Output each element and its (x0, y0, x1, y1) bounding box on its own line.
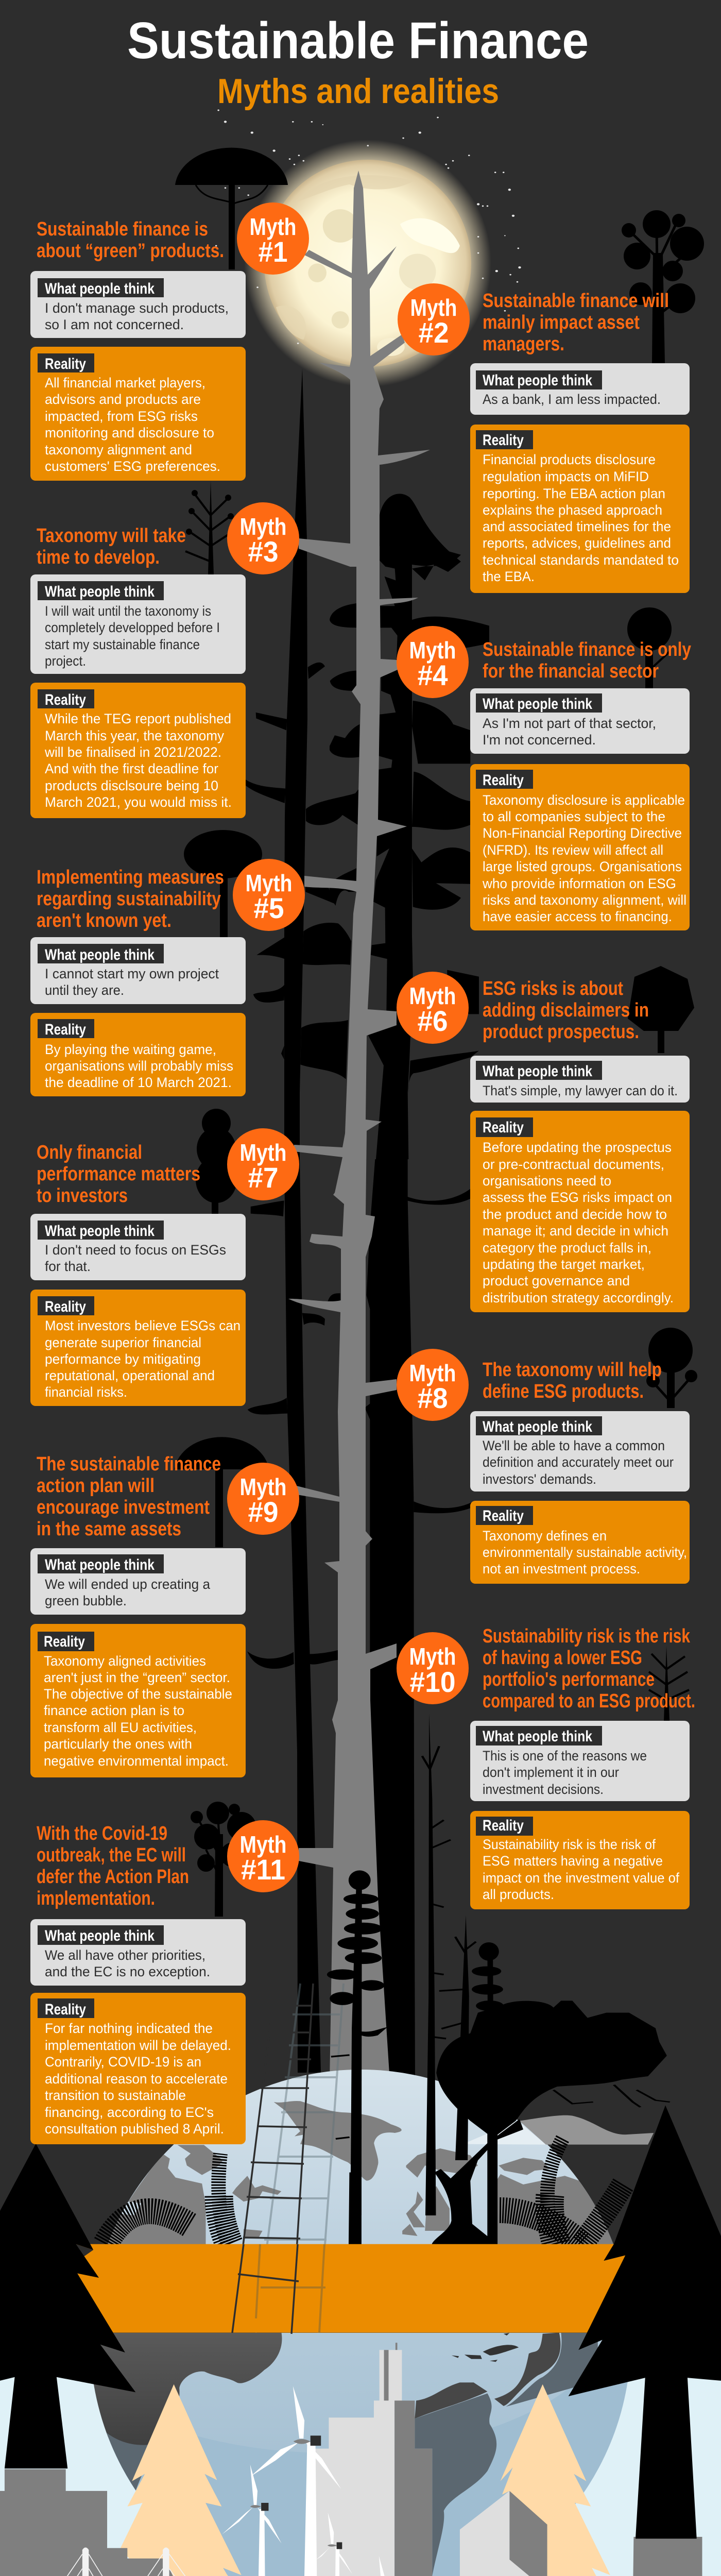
myth 4 reality: large listed groups. Organisations (483, 859, 682, 874)
myth 2 badge: Myth (410, 294, 457, 321)
ladder: dark (232, 1984, 313, 2334)
myth 11 badge (227, 1820, 299, 1892)
myth 11 heading: With the Covid-19 (37, 1823, 167, 1844)
black trees behind the text (175, 148, 704, 1917)
myth 10 badge: #10 (410, 1666, 455, 1698)
myth 9 badge: #9 (248, 1496, 278, 1528)
myth 9 reality: transform all EU activities, (44, 1720, 197, 1735)
myth 6 badge: Myth (409, 982, 456, 1009)
myth 6 reality: Reality (483, 1119, 524, 1136)
ghost ladder (256, 1984, 344, 2339)
tree: fir near myth 10 (649, 1646, 689, 1721)
myth 5 badge: #5 (253, 892, 284, 924)
myth 8 reality: environmentally sustainable activity, (483, 1545, 687, 1560)
myth 3 what people think: completely developped before I (45, 620, 220, 635)
myth 1 heading (37, 218, 224, 262)
myth 6 heading (483, 978, 649, 1043)
myth 11 what people think: What people think (45, 1927, 154, 1944)
myth 7 reality: generate superior financial (45, 1335, 201, 1350)
myth 10 reality: impact on the investment value of (483, 1870, 679, 1886)
myth 7 badge (227, 1128, 299, 1200)
myth 11 badge: #11 (241, 1853, 285, 1886)
orange band with ladders (76, 2244, 625, 2334)
right trunk and leaves (upper) (246, 541, 489, 1159)
myth 2 reality: explains the phased approach (483, 502, 662, 518)
myth 10 badge (397, 1632, 469, 1704)
myth 4 reality: Non-Financial Reporting Directive (483, 825, 682, 841)
myth 6 what people think: That's simple, my lawyer can do it. (483, 1083, 678, 1098)
myth 11 badge: Myth (240, 1831, 286, 1858)
myth 2 what people think (470, 363, 690, 415)
myth 11 heading: outbreak, the EC will (37, 1844, 186, 1866)
myth 4 reality (470, 764, 690, 930)
myth 11 reality (30, 1993, 246, 2144)
myth 5 reality: organisations will probably miss (45, 1058, 233, 1074)
myth 2 heading: managers. (483, 333, 564, 355)
myth 10 what people think (470, 1721, 690, 1801)
right trunk (bottom) (372, 1772, 415, 2081)
myth 2 what people think: As a bank, I am less impacted. (483, 392, 661, 407)
myth 9 heading: encourage investment (37, 1497, 210, 1518)
myth 7 what people think: for that. (45, 1259, 91, 1274)
myth 8 heading: The taxonomy will help (483, 1359, 662, 1381)
myth 11 reality: For far nothing indicated the (45, 2021, 213, 2036)
skyline (0, 2343, 721, 2576)
myth 3 reality: March 2021, you would miss it. (45, 794, 232, 810)
myth 4 what people think: I'm not concerned. (483, 732, 596, 748)
myth 10 heading (483, 1625, 695, 1712)
title: Sustainable Finance (127, 12, 589, 70)
myth 6 reality: updating the target market, (483, 1257, 645, 1272)
myth 10 what people think: don't implement it in our (483, 1765, 619, 1780)
myth 2 reality: and associated timelines for the (483, 519, 671, 534)
tree: umbrella near myth 9 (175, 1437, 269, 1547)
myth 6 reality: Before updating the prospectus (483, 1140, 672, 1155)
myth 11 heading: implementation. (37, 1888, 155, 1909)
myth 4 what people think: As I'm not part of that sector, (483, 716, 656, 731)
myth 9 badge: Myth (240, 1473, 286, 1500)
trunk: left black (284, 368, 321, 2073)
myth 7 what people think: What people think (45, 1223, 154, 1240)
myth 7 heading: to investors (37, 1185, 128, 1207)
cream pine left (121, 2384, 249, 2576)
panel: myth 5 (30, 859, 305, 1096)
myth 7 badge: Myth (240, 1139, 286, 1166)
myth 7 badge: #7 (248, 1161, 278, 1194)
myth 6 reality: or pre-contractual documents, (483, 1157, 664, 1172)
myth 3 what people think: I will wait until the taxonomy is (45, 603, 211, 619)
myth 3 badge: #3 (248, 535, 278, 568)
myth 3 what people think: start my sustainable finance (45, 637, 200, 652)
myth 5 badge (233, 859, 305, 931)
myth 8 reality: not an investment process. (483, 1561, 640, 1577)
myth 3 what people think: What people think (45, 583, 154, 600)
myth 6 reality: manage it; and decide in which (483, 1223, 668, 1239)
panel: myth 9 (30, 1453, 299, 1777)
myth 6 reality: organisations need to (483, 1173, 611, 1189)
myth 4 badge: Myth (409, 637, 456, 664)
tree: round near myth 8 (646, 1328, 697, 1408)
myth 1 what people think: What people think (45, 280, 154, 297)
myth 9 heading (37, 1453, 221, 1540)
myth 5 reality: By playing the waiting game, (45, 1042, 216, 1057)
myth 10 reality (470, 1811, 690, 1909)
myth 10 what people think: investment decisions. (483, 1782, 604, 1797)
myth 1 reality: Reality (45, 355, 86, 372)
myth 4 reality: (NFRD). Its review will affect all (483, 842, 663, 858)
myth 4 heading (483, 639, 691, 682)
myth 6 badge: #6 (417, 1005, 448, 1037)
myth 1 reality (30, 347, 246, 481)
myth 6 what people think (470, 1056, 690, 1103)
panel: myth 10 (397, 1625, 695, 1909)
myth 3 reality: March this year, the taxonomy (45, 728, 224, 743)
myth 3 reality: products disclsoure being 10 (45, 778, 218, 793)
panel: myth 2 (398, 283, 690, 593)
myth 2 badge: #2 (418, 316, 449, 349)
globe lower half (94, 2333, 627, 2576)
myth 8 reality: Reality (483, 1507, 524, 1524)
myth 11 reality: transition to sustainable (45, 2088, 186, 2103)
myth 6 heading: product prospectus. (483, 1021, 639, 1043)
myth 9 what people think: green bubble. (45, 1593, 127, 1608)
tree: round leaves near myth 2 (622, 210, 704, 363)
myth 6 reality: assess the ESG risks impact on (483, 1190, 672, 1205)
myth 8 what people think: We'll be able to have a common (483, 1438, 665, 1453)
myth 3 reality: Reality (45, 691, 86, 708)
myth 9 what people think (30, 1548, 246, 1615)
myth 4 what people think: What people think (483, 696, 592, 713)
myth 2 reality: technical standards mandated to (483, 552, 679, 568)
panel: myth 1 (30, 202, 309, 481)
myth 10 reality: ESG matters having a negative (483, 1853, 663, 1869)
myth 10 what people think: What people think (483, 1728, 592, 1745)
left black pine (0, 2144, 135, 2468)
myth 1 reality: advisors and products are (45, 392, 201, 407)
tree: blobs near myth 7 (196, 1109, 237, 1214)
myth 9 reality: Taxonomy aligned activities (44, 1653, 206, 1669)
myth 2 reality: Financial products disclosure (483, 452, 656, 467)
myth 6 heading: adding disclaimers in (483, 999, 649, 1021)
tree: fir near myth 3 (185, 481, 234, 574)
panel: myth 8 (397, 1349, 690, 1584)
myth 7 heading: performance matters (37, 1163, 200, 1185)
myth 6 reality: category the product falls in, (483, 1240, 651, 1256)
tree: umbrella near myth 1 (175, 148, 288, 269)
myth 1 what people think: I don't manage such products, (45, 300, 229, 316)
myth 9 heading: The sustainable finance (37, 1453, 221, 1475)
myth 4 reality: have easier access to financing. (483, 909, 672, 924)
myth 2 reality: Reality (483, 432, 524, 449)
myth 1 heading: about “green” products. (37, 240, 224, 262)
myth 11 reality: consultation published 8 April. (45, 2121, 224, 2137)
myth 8 badge: Myth (409, 1360, 456, 1386)
myth 7 reality: financial risks. (45, 1384, 127, 1400)
myth 11 heading (37, 1823, 189, 1909)
panel: myth 3 (30, 502, 299, 818)
myth 7 reality: reputational, operational and (45, 1368, 215, 1383)
panel: myth 11 (30, 1820, 299, 2144)
myth 3 reality: And with the first deadline for (45, 761, 218, 776)
myth 5 heading (37, 867, 224, 931)
tree: round near myth 4 (627, 607, 672, 688)
myth 8 what people think (470, 1411, 690, 1492)
myth 11 reality: Reality (45, 2001, 86, 2018)
myth 9 reality: aren't just in the “green” sector. (44, 1670, 230, 1685)
myth 7 reality (30, 1290, 246, 1406)
myth 7 what people think: I don't need to focus on ESGs (45, 1242, 226, 1258)
big tree (349, 2001, 670, 2244)
myth 8 what people think: What people think (483, 1418, 592, 1435)
myth 10 what people think: This is one of the reasons we (483, 1748, 647, 1764)
myth 7 reality: Reality (45, 1298, 86, 1315)
myth 2 reality: regulation impacts on MiFID (483, 469, 649, 484)
wind turbines (52, 2386, 403, 2576)
myth 1 badge: Myth (249, 213, 297, 240)
myth 9 what people think: What people think (45, 1556, 154, 1573)
myth 10 reality: Reality (483, 1817, 524, 1834)
myth 3 badge (227, 502, 299, 574)
myth 9 reality: Reality (44, 1633, 85, 1650)
myth 8 heading: define ESG products. (483, 1381, 644, 1402)
myth 3 reality (30, 683, 246, 818)
myth 4 reality: Reality (483, 772, 524, 789)
myth 7 reality: Most investors believe ESGs can (45, 1318, 241, 1333)
myth 1 heading: Sustainable finance is (37, 218, 208, 240)
cream pine right (500, 2384, 610, 2576)
myth 1 reality: All financial market players, (45, 375, 205, 391)
myth 4 reality: Taxonomy disclosure is applicable (483, 792, 685, 808)
myth 3 what people think (30, 574, 246, 674)
globe sphere top (108, 2070, 613, 2244)
myth 7 reality: performance by mitigating (45, 1351, 201, 1367)
ferns (106, 2138, 623, 2244)
myth 1 reality: impacted, from ESG risks (45, 409, 198, 424)
myth 3 heading: Taxonomy will take (37, 525, 186, 547)
fir D (439, 1916, 476, 2160)
myth 4 reality: risks and taxonomy alignment, will (483, 892, 686, 908)
myth 5 badge: Myth (245, 870, 293, 896)
myth 7 what people think (30, 1214, 246, 1280)
myth 3 heading: time to develop. (37, 547, 160, 568)
black pines, firs and big tree on the globe (106, 1714, 670, 2244)
myth 3 heading (37, 525, 186, 568)
myth 7 heading (37, 1142, 200, 1207)
myth 5 reality: Reality (45, 1021, 86, 1038)
myth 6 reality: product governance and (483, 1273, 630, 1289)
myth 10 reality: Sustainability risk is the risk of (483, 1837, 656, 1852)
myth 4 badge: #4 (417, 659, 448, 691)
myth 8 what people think: investors' demands. (483, 1471, 596, 1487)
myth 9 reality (30, 1624, 246, 1777)
myth 1 what people think: so I am not concerned. (45, 317, 184, 332)
myth 9 reality: The objective of the sustainable (44, 1686, 232, 1702)
myth 5 heading: aren't known yet. (37, 910, 171, 931)
myth 9 reality: negative environmental impact. (44, 1753, 229, 1769)
right black pine (569, 2105, 721, 2538)
myth 7 heading: Only financial (37, 1142, 142, 1163)
myth 8 reality (470, 1501, 690, 1584)
myth 6 reality (470, 1111, 690, 1312)
myth 10 heading: of having a lower ESG (483, 1647, 642, 1669)
myth 4 reality: who provide information on ESG (482, 876, 676, 891)
moon with stars (215, 110, 521, 387)
myth 4 what people think (470, 688, 690, 754)
panel: myth 6 (397, 972, 690, 1312)
myth 3 reality: will be finalised in 2021/2022. (44, 744, 221, 760)
myth 5 reality: the deadline of 10 March 2021. (45, 1075, 232, 1090)
ladder on the band: ghost (256, 2244, 325, 2333)
ladder on the band: dark (232, 2244, 299, 2334)
myth 9 heading: in the same assets (37, 1518, 181, 1540)
myth 9 badge (227, 1463, 299, 1535)
bridge (23, 2548, 258, 2576)
myth 4 heading: for the financial sector (483, 660, 659, 682)
myth 1 reality: customers' ESG preferences. (45, 459, 220, 474)
myth 11 what people think (30, 1919, 246, 1986)
myth 11 reality: financing, according to EC's (45, 2105, 214, 2120)
myth 2 reality: reports, advices, guidelines and (483, 535, 671, 551)
myth 11 what people think: We all have other priorities, (45, 1947, 205, 1963)
myth 2 what people think: What people think (483, 372, 592, 389)
grey foreground tree with branches (288, 171, 430, 2081)
continents (108, 2101, 614, 2244)
myth 5 heading: Implementing measures (37, 867, 224, 888)
myth 2 heading: mainly impact asset (483, 312, 640, 333)
myth 8 badge: #8 (417, 1382, 448, 1414)
myth 2 heading: Sustainable finance will (483, 290, 669, 312)
myth 11 reality: additional reason to accelerate (45, 2071, 228, 2087)
black back trunks and leaves (246, 368, 489, 2081)
pine B (472, 1942, 504, 2215)
myth 2 reality: reporting. The EBA action plan (483, 486, 665, 501)
myth 6 badge (397, 972, 469, 1044)
tree: round leaves near myth 11 (191, 1802, 256, 1917)
myth 1 badge: #1 (259, 235, 287, 268)
myth 1 badge (237, 202, 309, 275)
myth 10 badge: Myth (409, 1643, 456, 1670)
subtitle: Myths and realities (217, 72, 499, 111)
fir C (422, 1714, 451, 2215)
right trunk and leaves (lower) (247, 1159, 472, 1777)
panel: myth 7 (30, 1128, 299, 1406)
myth 5 what people think: I cannot start my own project (45, 966, 219, 981)
myth 11 what people think: and the EC is no exception. (45, 1964, 210, 1979)
panel: myth 4 (397, 626, 691, 930)
hill behind big tree (520, 2115, 654, 2145)
myth 11 reality: implementation will be delayed. (45, 2038, 231, 2053)
myth 6 reality: distribution strategy accordingly. (483, 1290, 674, 1306)
myth 8 badge (397, 1349, 469, 1421)
myth 6 what people think: What people think (483, 1063, 592, 1080)
myth 10 reality: all products. (483, 1887, 554, 1902)
myth 5 heading: regarding sustainability (37, 888, 221, 910)
myth 5 what people think: What people think (45, 946, 154, 963)
myth 2 heading (483, 290, 669, 355)
pine A (327, 1870, 384, 2215)
tree: hexagon near myth 6 (628, 966, 694, 1053)
myth 4 reality: to all companies subject to the (483, 809, 665, 824)
myth 6 heading: ESG risks is about (483, 978, 623, 999)
myth 3 badge: Myth (240, 513, 286, 540)
myth 5 what people think (30, 937, 246, 1004)
myth 11 heading: defer the Action Plan (37, 1866, 189, 1888)
trunk: right black upper cap (380, 494, 461, 572)
myth 5 reality (30, 1013, 246, 1096)
myth 4 badge (397, 626, 469, 698)
myth 1 reality: monitoring and disclosure to (45, 425, 214, 440)
myth 1 reality: taxonomy alignment and (45, 442, 192, 457)
myth 2 badge (398, 283, 470, 355)
myth 5 what people think: until they are. (45, 982, 124, 998)
myth 10 heading: portfolio's performance (483, 1669, 655, 1690)
tree: oval near myth 5 (184, 830, 262, 937)
sky (0, 2333, 721, 2576)
myth 8 what people think: definition and accurately meet our (483, 1454, 674, 1470)
myth 2 reality: the EBA. (483, 569, 535, 584)
myth 2 reality (470, 425, 690, 593)
myth 8 reality: Taxonomy defines en (483, 1528, 607, 1544)
myth 8 heading (483, 1359, 662, 1402)
myth 3 reality: While the TEG report published (45, 711, 231, 726)
myth 6 reality: the product and decide how to (483, 1207, 667, 1222)
myth 9 reality: finance action plan is to (44, 1703, 184, 1718)
myth 9 what people think: We will ended up creating a (45, 1577, 211, 1592)
myth 11 reality: Contrarily, COVID-19 is an (45, 2054, 201, 2070)
myth 1 what people think (30, 271, 246, 338)
myth 3 what people think: project. (45, 653, 86, 669)
globe upper half (108, 2070, 654, 2244)
myth 9 heading: action plan will (37, 1475, 154, 1497)
myth 9 reality: particularly the ones with (44, 1736, 192, 1752)
